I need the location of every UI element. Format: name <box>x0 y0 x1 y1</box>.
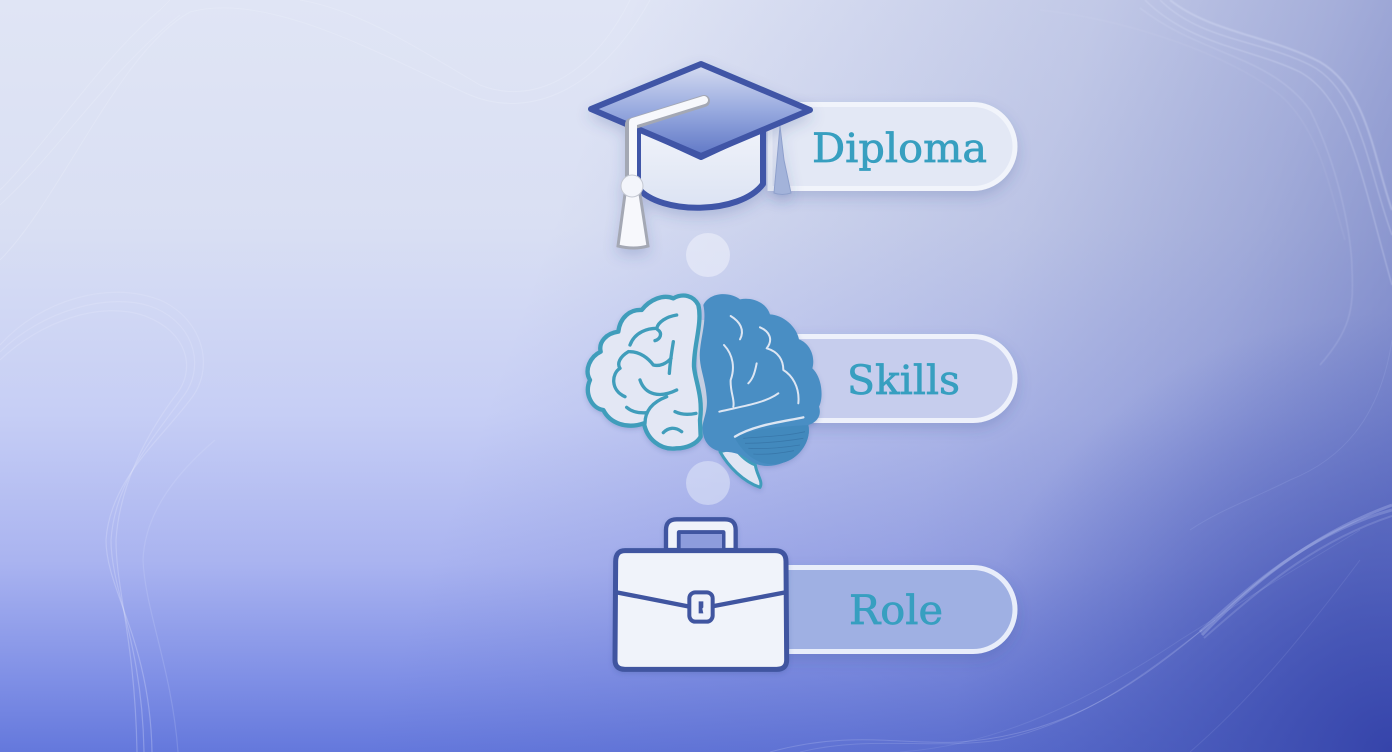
brain left hemisphere <box>588 296 701 449</box>
decorative wave band: lower right <box>770 340 1392 752</box>
icon: brain <box>588 294 822 487</box>
label: Skills: Skills <box>847 358 960 404</box>
handle opening <box>681 534 722 551</box>
briefcase clasp <box>689 592 713 622</box>
pill: Role <box>770 568 1015 652</box>
label: Diploma: Diploma <box>812 126 987 172</box>
pill body: Diploma <box>770 104 1015 188</box>
central divide <box>697 320 710 427</box>
pill: Diploma <box>770 104 1015 188</box>
pill: Skills <box>770 336 1015 420</box>
connector dot: lower <box>686 461 730 505</box>
brain right hemisphere <box>700 294 822 466</box>
cerebellum lines <box>743 432 805 454</box>
briefcase body <box>615 551 787 669</box>
right hemisphere folds <box>719 316 803 437</box>
briefcase handle <box>666 519 736 550</box>
brain stem <box>720 448 761 487</box>
briefcase flap <box>617 592 785 607</box>
strap highlight <box>633 100 704 182</box>
cap back tassel <box>774 126 791 194</box>
keyhole <box>699 601 703 613</box>
decorative wave lines: left <box>0 292 215 752</box>
left hemisphere folds <box>614 315 696 433</box>
connector dot: upper <box>686 233 730 277</box>
strap <box>631 101 704 182</box>
mortarboard <box>591 64 810 156</box>
icon: briefcase <box>615 519 787 669</box>
pill body: Role <box>770 568 1015 652</box>
cap base <box>638 128 763 208</box>
tassel knob <box>621 175 643 197</box>
cerebellum <box>735 425 809 464</box>
decorative wave lines: top right <box>1040 0 1392 365</box>
pill body: Skills <box>770 336 1015 420</box>
label: Role: Role <box>849 588 943 634</box>
tassel <box>618 194 648 248</box>
icon: graduation cap <box>591 64 810 248</box>
decorative wave lines: top left <box>0 0 650 260</box>
